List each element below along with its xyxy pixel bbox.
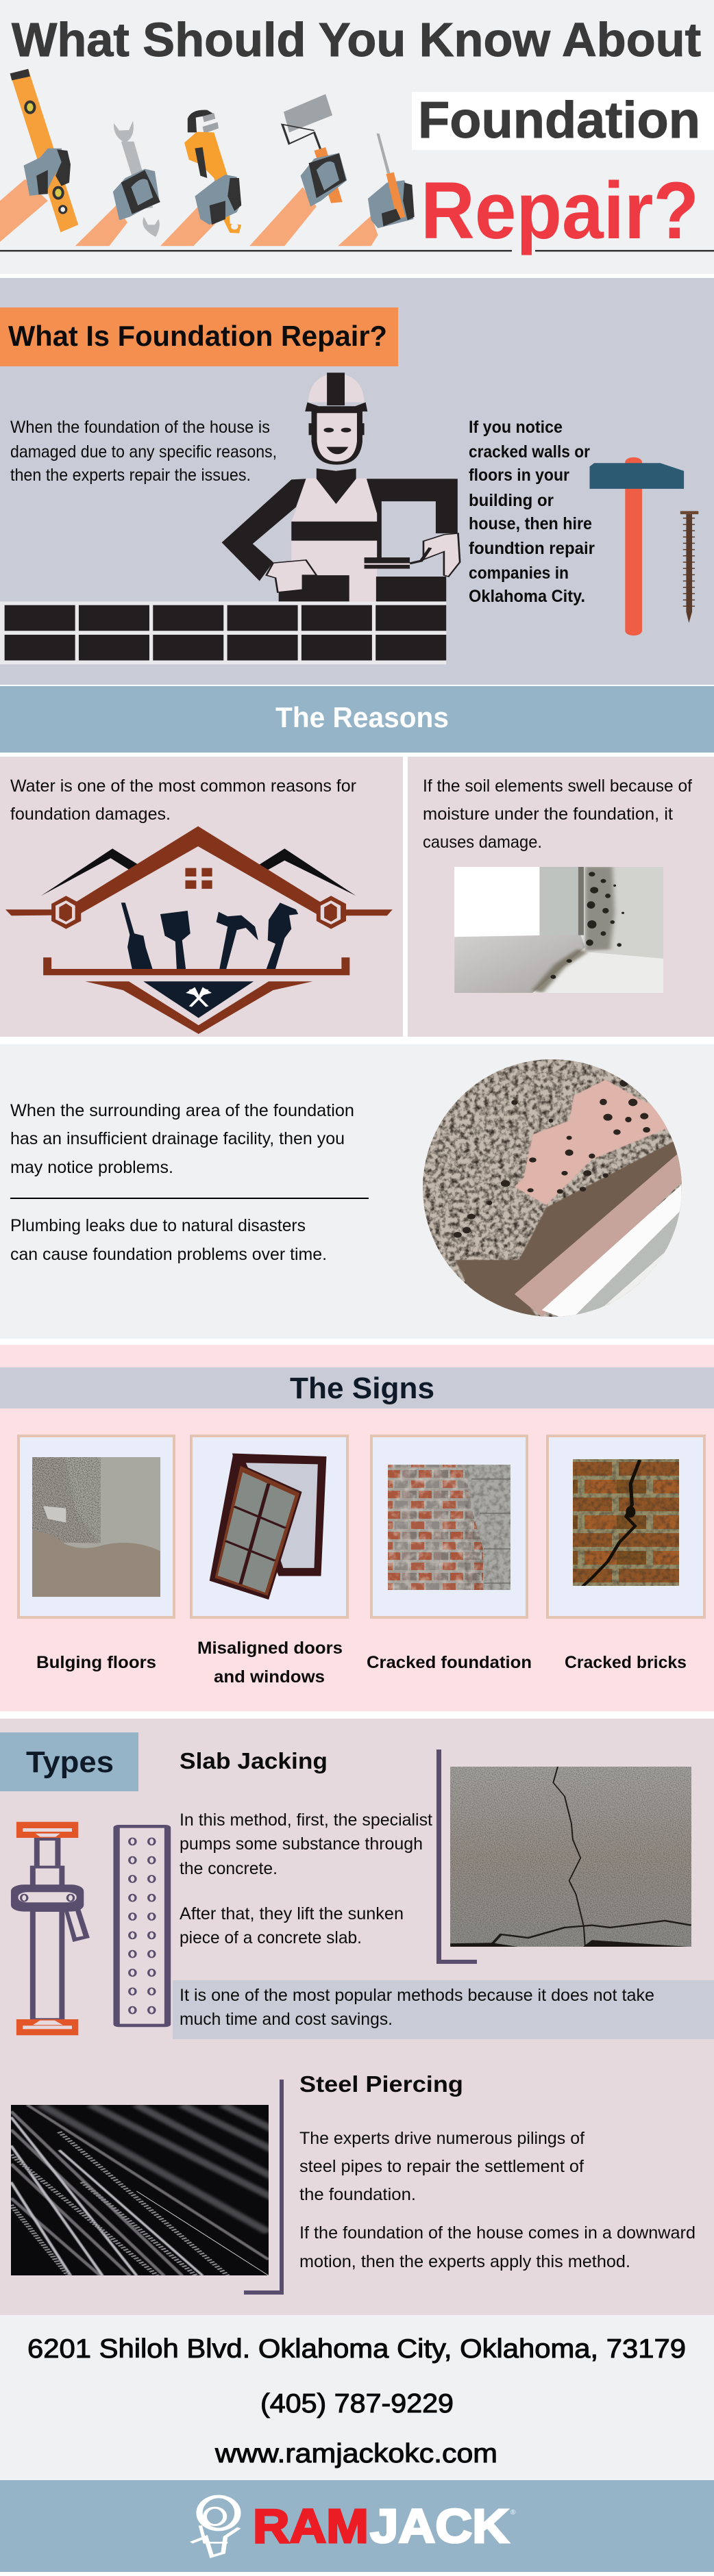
text: plumbing: can cause foundation problems over time. bbox=[10, 1245, 327, 1264]
text: slab jacking steps: piece of a concrete slab. bbox=[180, 1928, 362, 1947]
text: plumbing bbox=[10, 1216, 327, 1264]
text: steel piercing: If the foundation of the house comes in a downward bbox=[299, 2223, 695, 2243]
label: misaligned doors and windows bbox=[197, 1639, 343, 1687]
text: water reason: Water is one of the most common reasons for bbox=[10, 776, 356, 796]
label: bulging floors: Bulging floors bbox=[36, 1653, 156, 1672]
label: misaligned doors and windows: and windows bbox=[214, 1667, 325, 1687]
illustration: bricklayer bbox=[0, 372, 460, 664]
card: bulging floors bbox=[19, 1436, 174, 1617]
label: misaligned doors and windows: Misaligned doors bbox=[197, 1639, 343, 1658]
heading: Types bbox=[0, 1732, 138, 1791]
worker body bbox=[222, 468, 460, 601]
text: call to action: foundtion repair bbox=[469, 539, 595, 558]
photo: mold circle bbox=[423, 1059, 683, 1317]
text: call to action: Oklahoma City. bbox=[469, 587, 585, 606]
icon: hammer bbox=[590, 457, 684, 635]
callout: popular method bbox=[173, 1980, 714, 2039]
icon: arm and pipe wrench bbox=[160, 110, 241, 246]
icon: perforated jack post bbox=[116, 1826, 168, 2025]
callout: popular method: It is one of the most popular methods because it does not take bbox=[180, 1986, 654, 2005]
text: steel piercing: motion, then the experts apply this method. bbox=[299, 2252, 630, 2271]
title word: Repair?: Repair? bbox=[421, 166, 699, 256]
panel: reason water bbox=[0, 757, 403, 1037]
panel: Types bbox=[0, 1719, 714, 2315]
text: slab jacking steps: pumps some substance through bbox=[180, 1834, 423, 1854]
text: steel piercing: The experts drive numerous pilings of bbox=[299, 2129, 584, 2148]
worker head bbox=[305, 372, 367, 463]
heading: Types: Types bbox=[26, 1745, 114, 1779]
title line 1: What Should You Know About bbox=[12, 13, 701, 66]
photo: cracked slab bbox=[450, 1767, 691, 1947]
icon: arm and paint roller bbox=[249, 94, 347, 246]
panel: The Signs bbox=[0, 1345, 714, 1711]
heading: What Is Foundation Repair bbox=[0, 307, 398, 366]
panel: footer logo bbox=[0, 2480, 714, 2572]
card: cracked foundation bbox=[371, 1436, 527, 1617]
text: slab jacking steps: After that, they lift the sunken bbox=[180, 1904, 404, 1923]
icon: ram head bbox=[191, 2497, 239, 2556]
text: call to action: house, then hire bbox=[469, 514, 592, 533]
label: cracked foundation: Cracked foundation bbox=[367, 1653, 532, 1672]
text: steel piercing: steel pipes to repair the settlement of bbox=[299, 2157, 584, 2176]
text: soil reason bbox=[423, 776, 692, 852]
text: drainage: When the surrounding area of the foundation bbox=[10, 1101, 354, 1120]
brick wall bbox=[0, 601, 446, 664]
callout: popular method: much time and cost savings. bbox=[180, 2010, 393, 2029]
logo wordmark bbox=[253, 2499, 516, 2553]
heading: Steel Piercing: Steel Piercing bbox=[299, 2071, 463, 2097]
text: call to action: If you notice bbox=[469, 418, 563, 437]
text: soil reason: moisture under the foundation, it bbox=[423, 805, 673, 824]
text: soil reason: If the soil elements swell because of bbox=[423, 776, 692, 796]
label: cracked bricks: Cracked bricks bbox=[565, 1653, 687, 1672]
panel: header bbox=[0, 0, 714, 274]
heading: What Is Foundation Repair: What Is Foundation Repair? bbox=[8, 320, 387, 352]
illustration: hands holding tools bbox=[0, 69, 415, 246]
card: misaligned window bbox=[191, 1436, 347, 1617]
text: slab jacking steps bbox=[180, 1810, 432, 1947]
text: water reason: foundation damages. bbox=[10, 805, 171, 824]
text: definition: damaged due to any specific reasons, bbox=[10, 442, 277, 462]
card: cracked bricks bbox=[547, 1436, 704, 1617]
text: phone: (405) 787-9229 bbox=[260, 2389, 454, 2419]
text: steel piercing bbox=[299, 2129, 695, 2271]
photo: steel rebar bbox=[11, 2105, 282, 2275]
heading band: The Reasons bbox=[0, 686, 714, 753]
logo wordmark: JACK bbox=[370, 2499, 509, 2553]
panel: contact details bbox=[0, 2315, 714, 2480]
text: call to action bbox=[469, 418, 595, 606]
text: drainage: may notice problems. bbox=[10, 1158, 173, 1177]
logo wordmark: ® bbox=[510, 2509, 516, 2516]
text: steel piercing: the foundation. bbox=[299, 2185, 416, 2204]
heading band: The Reasons: The Reasons bbox=[275, 701, 449, 733]
text: call to action: floors in your bbox=[469, 466, 569, 485]
title box: Foundation: Foundation bbox=[418, 91, 700, 149]
text: definition bbox=[10, 418, 277, 485]
logo wordmark: RAM bbox=[253, 2499, 369, 2553]
icon: screw bbox=[680, 511, 698, 623]
text: drainage: has an insufficient drainage facility, then you bbox=[10, 1129, 345, 1148]
panel: drainage and plumbing bbox=[0, 1044, 714, 1339]
panel: What Is Foundation Repair bbox=[0, 278, 714, 685]
text: slab jacking steps: In this method, first, the specialist bbox=[180, 1810, 432, 1830]
text: definition: then the experts repair the issues. bbox=[10, 466, 251, 485]
text: slab jacking steps: the concrete. bbox=[180, 1859, 278, 1878]
text: call to action: cracked walls or bbox=[469, 442, 590, 462]
text: call to action: building or bbox=[469, 491, 554, 510]
icon: screw jack bbox=[11, 1822, 90, 2035]
panel: reason soil bbox=[408, 757, 714, 1037]
text: soil reason: causes damage. bbox=[423, 833, 542, 852]
heading: Slab Jacking: Slab Jacking bbox=[180, 1748, 328, 1773]
icon: arm and screwdriver bbox=[338, 134, 415, 246]
photo: mold at window bbox=[454, 867, 663, 993]
text: website: www.ramjackokc.com bbox=[214, 2439, 497, 2468]
text: drainage bbox=[10, 1101, 354, 1177]
text: definition: When the foundation of the house is bbox=[10, 418, 270, 437]
icon: arm and level bbox=[0, 69, 78, 242]
text: water reason bbox=[10, 776, 356, 824]
icon: house tools logo bbox=[5, 826, 393, 1034]
icon: arm and spanner bbox=[75, 121, 160, 246]
bracket: slab photo bbox=[436, 1750, 477, 1964]
text: call to action: companies in bbox=[469, 564, 569, 583]
text: address: 6201 Shiloh Blvd. Oklahoma City, Oklahoma, 73179 bbox=[27, 2334, 686, 2364]
bracket: steel photo bbox=[244, 2080, 284, 2295]
divider under header tools bbox=[0, 250, 714, 252]
heading band: The Signs: The Signs bbox=[290, 1372, 434, 1405]
heading band: The Signs bbox=[0, 1367, 714, 1409]
text: plumbing: Plumbing leaks due to natural disasters bbox=[10, 1216, 306, 1235]
